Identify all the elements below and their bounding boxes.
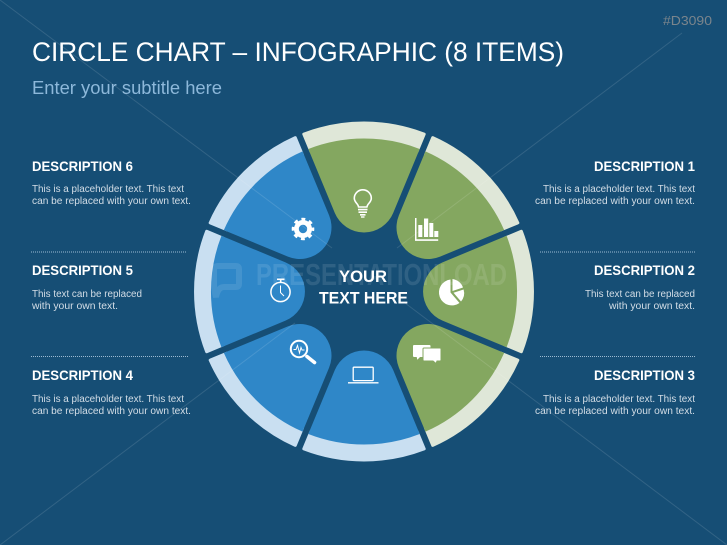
description 4 bbox=[32, 367, 191, 417]
segment 2: upper right bbox=[363, 130, 526, 292]
segment 3: right bbox=[423, 231, 532, 352]
description 5 bbox=[31, 262, 142, 312]
description 3 bbox=[535, 367, 695, 417]
segment 5: bottom bbox=[304, 351, 424, 460]
center text: YOUR bbox=[339, 267, 387, 286]
center text bbox=[319, 267, 408, 308]
description 6: DESCRIPTION 6 bbox=[32, 158, 133, 174]
description 2: DESCRIPTION 2 bbox=[594, 262, 695, 278]
center text: TEXT HERE bbox=[319, 288, 408, 308]
description 1: DESCRIPTION 1 bbox=[594, 158, 695, 174]
description 6: This is a placeholder text. This text bbox=[32, 184, 184, 195]
description 2: This text can be replaced bbox=[585, 289, 695, 300]
segment 1: top bbox=[304, 123, 424, 232]
watermark logo bbox=[214, 266, 239, 297]
description 1: can be replaced with your own text. bbox=[535, 196, 695, 207]
description 4: DESCRIPTION 4 bbox=[32, 367, 133, 383]
icon: light bulb bbox=[354, 190, 371, 217]
description 5: with your own text. bbox=[31, 301, 118, 312]
description 6 bbox=[32, 158, 191, 207]
circle chart bbox=[196, 123, 532, 460]
description 2 bbox=[585, 262, 695, 312]
watermark text: PRESENTATIONLOAD bbox=[256, 257, 507, 292]
icon: pie chart bbox=[439, 279, 464, 305]
description 3: This is a placeholder text. This text bbox=[543, 394, 695, 405]
icon: laptop bbox=[348, 367, 378, 383]
description 1 bbox=[535, 158, 695, 207]
subtitle: Enter your subtitle here bbox=[32, 78, 222, 98]
description 1: This is a placeholder text. This text bbox=[543, 184, 695, 195]
description 3: DESCRIPTION 3 bbox=[594, 367, 695, 383]
description 6: can be replaced with your own text. bbox=[32, 196, 191, 207]
icon: chat bubbles bbox=[413, 345, 441, 364]
segment 4: lower right bbox=[363, 291, 526, 453]
segment 8: upper left bbox=[202, 130, 365, 292]
description 2: with your own text. bbox=[608, 301, 695, 312]
icon: gear bbox=[293, 219, 313, 239]
icon: bar chart bbox=[415, 218, 438, 241]
description 4: This is a placeholder text. This text bbox=[32, 394, 184, 405]
segment 6: lower left bbox=[202, 291, 365, 453]
product code: #D3090 bbox=[663, 13, 712, 28]
description 3: can be replaced with your own text. bbox=[535, 406, 695, 417]
segment 7: left bbox=[196, 231, 305, 352]
icon: stopwatch bbox=[271, 279, 290, 302]
icon: magnifier with pulse bbox=[291, 341, 314, 362]
description 5: DESCRIPTION 5 bbox=[32, 262, 133, 278]
title: CIRCLE CHART – INFOGRAPHIC (8 ITEMS) bbox=[32, 37, 564, 67]
description 5: This text can be replaced bbox=[32, 289, 142, 300]
description 4: can be replaced with your own text. bbox=[32, 406, 191, 417]
